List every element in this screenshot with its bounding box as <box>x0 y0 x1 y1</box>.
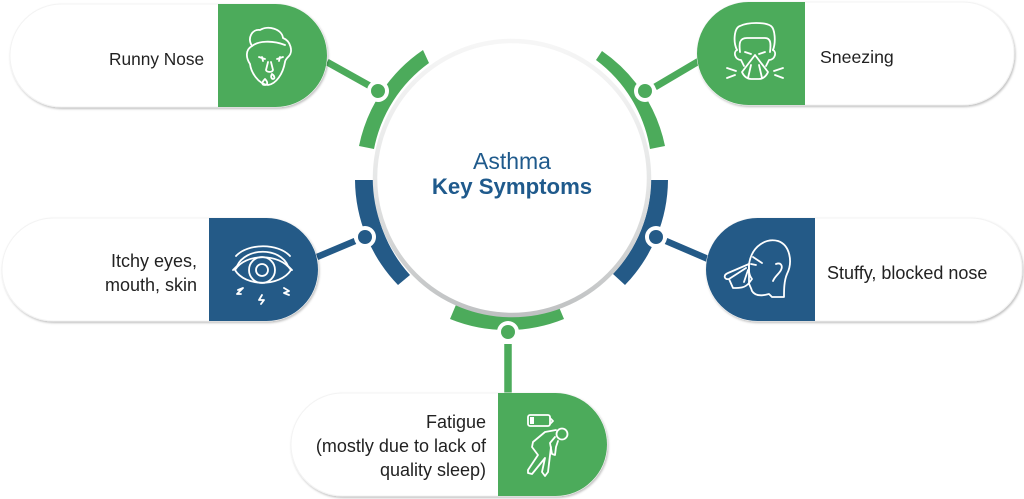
icon: sneezing face <box>727 23 783 79</box>
title: Asthma <box>473 148 551 174</box>
panel: stuffy nose: Stuffy, blocked nose <box>827 263 987 283</box>
central circle <box>375 41 649 315</box>
panel: fatigue: (mostly due to lack of <box>316 436 487 456</box>
connector: stuffy nose <box>645 226 708 259</box>
icon: runny nose face <box>247 28 291 85</box>
icon: person blowing nose <box>725 240 790 297</box>
panel: sneezing: Sneezing <box>820 47 894 67</box>
connector: runny nose <box>327 62 389 102</box>
arc: bottom green <box>450 300 564 330</box>
arc: right blue <box>613 180 668 285</box>
connector: itchy eyes <box>317 226 376 257</box>
icon: tired person with low battery <box>528 415 568 476</box>
panel: sneezing <box>697 2 1014 105</box>
panel: fatigue: Fatigue <box>426 412 486 432</box>
connector: sneezing <box>634 61 699 102</box>
panel: runny nose <box>10 4 327 107</box>
panel: runny nose: Runny Nose <box>109 49 204 69</box>
panel: fatigue <box>291 393 607 496</box>
arc: top right green <box>596 51 665 149</box>
panel: fatigue: quality sleep) <box>380 460 486 480</box>
panel: itchy eyes: mouth, skin <box>105 275 197 295</box>
central circle: Key Symptoms <box>432 174 592 199</box>
connector: fatigue <box>497 321 519 393</box>
arc: top left green <box>359 50 429 149</box>
icon: itchy eye <box>233 246 292 304</box>
arc: left blue <box>355 180 410 285</box>
panel: itchy eyes <box>2 218 318 321</box>
panel: stuffy nose <box>706 218 1022 321</box>
panel: itchy eyes: Itchy eyes, <box>111 251 197 271</box>
